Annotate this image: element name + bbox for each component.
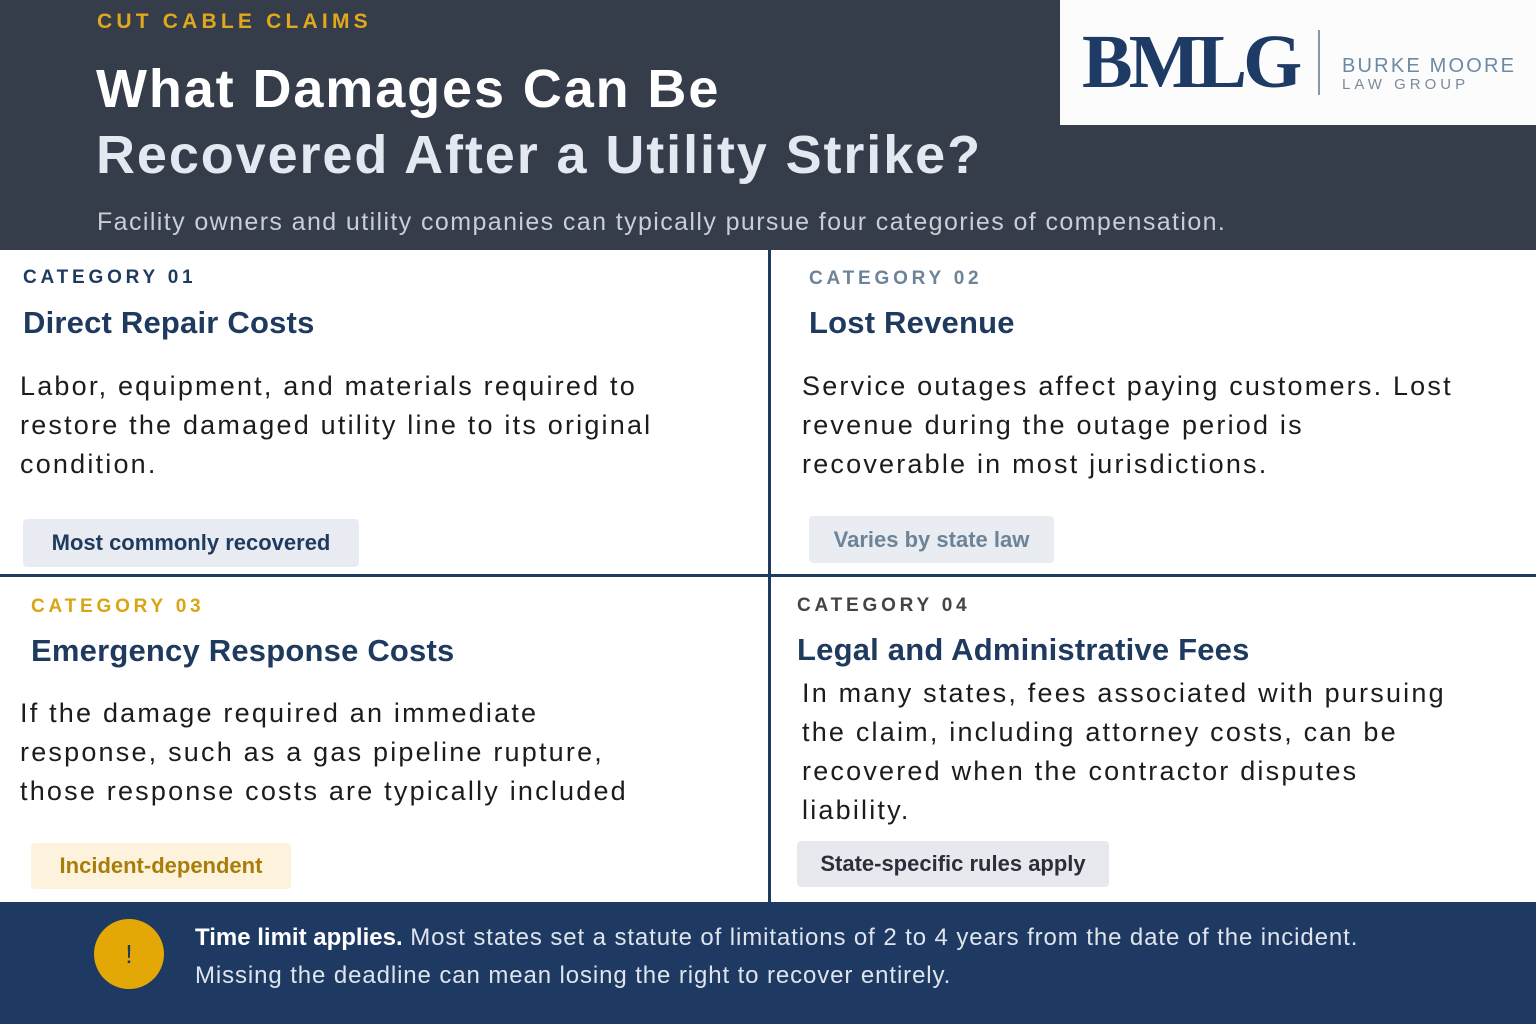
panel: category 02 — [802, 268, 1453, 563]
icon: warning: ! — [125, 938, 133, 968]
panel: category 03: those response costs are typically included — [20, 776, 628, 806]
panel: category 04: recovered when the contractor disputes — [802, 756, 1358, 786]
panel: category 02: Varies by state law — [834, 526, 1029, 552]
panel: category 03: Emergency Response Costs — [31, 633, 454, 668]
logo — [1060, 0, 1536, 125]
callout: time limit banner — [0, 902, 1536, 1024]
panel: category 04: the claim, including attorney costs, can be — [802, 717, 1398, 747]
panel: category 04: In many states, fees associated with pursuing — [802, 678, 1446, 708]
panel: category 03: If the damage required an immediate — [20, 698, 538, 728]
logo: BMLG — [1082, 20, 1298, 104]
panel: category 04: Legal and Administrative Fees — [797, 632, 1250, 667]
panel: category 02: CATEGORY 02 — [809, 268, 982, 289]
panel: category 02: recoverable in most jurisdictions. — [802, 449, 1268, 479]
panel: category 02: revenue during the outage period is — [802, 410, 1304, 440]
panel: category 01: CATEGORY 01 — [23, 267, 196, 288]
panel: category 01 — [20, 267, 652, 567]
panel: category 03: response, such as a gas pipeline rupture, — [20, 737, 604, 767]
panel: category 04 — [797, 595, 1446, 887]
panel: category 03: CATEGORY 03 — [31, 596, 204, 617]
logo: BURKE MOORE — [1342, 55, 1516, 77]
icon: warning — [94, 919, 164, 989]
panel: category 01: Direct Repair Costs — [23, 305, 315, 340]
subtitle: Facility owners and utility companies can typically pursue four categories of compensation. — [97, 208, 1226, 236]
callout: time limit banner: Missing the deadline can mean losing the right to recover entirely. — [195, 962, 951, 989]
panel: category 04: liability. — [802, 795, 911, 825]
dividers — [768, 250, 771, 902]
panel: category 01: Most commonly recovered — [52, 530, 330, 555]
panel: category 02: Lost Revenue — [809, 305, 1015, 340]
title: Recovered After a Utility Strike? — [96, 125, 982, 185]
panel: category 04: State-specific rules apply — [820, 851, 1086, 876]
title: What Damages Can Be — [96, 59, 720, 119]
panel: category 01: Labor, equipment, and materials required to — [20, 371, 637, 401]
title — [96, 59, 982, 185]
panel: category 04: CATEGORY 04 — [797, 595, 970, 616]
eyebrow label: CUT CABLE CLAIMS — [97, 10, 372, 33]
header band — [0, 0, 1536, 250]
callout: time limit banner: Time limit applies. Most states set a statute of limitations of 2 to 4 years from the date of the incident. — [195, 924, 1358, 951]
panel: category 01: restore the damaged utility line to its original — [20, 410, 652, 440]
panel: category 03 — [20, 596, 628, 889]
panel: category 01: condition. — [20, 449, 158, 479]
panel: category 03: Incident-dependent — [60, 853, 262, 878]
logo: LAW GROUP — [1342, 76, 1469, 93]
panel: category 02: Service outages affect paying customers. Lost — [802, 371, 1453, 401]
